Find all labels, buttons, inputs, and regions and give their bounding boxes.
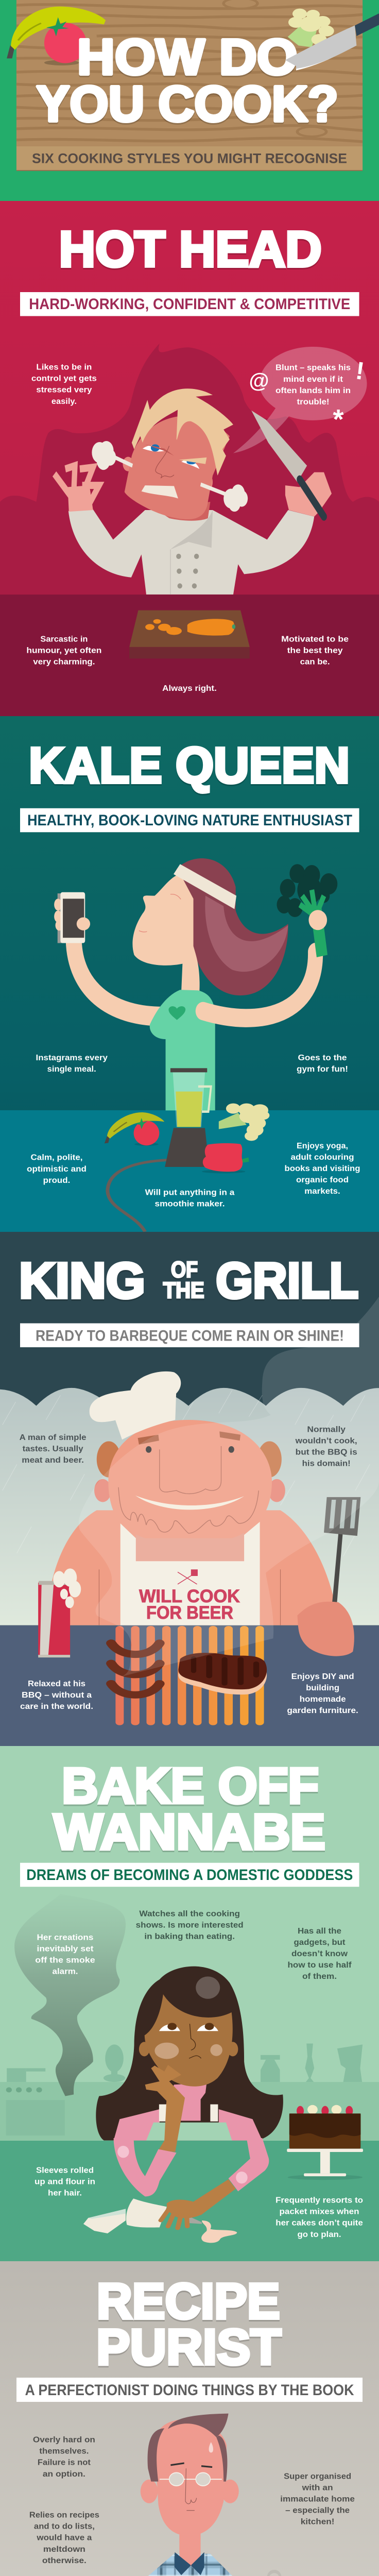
heading: WANNABE bbox=[54, 1804, 325, 1860]
text: relies on recipes: would have a bbox=[36, 2534, 92, 2543]
text: in control: Likes to be in bbox=[36, 363, 92, 372]
text: simple tastes: tastes. Usually bbox=[23, 1445, 83, 1453]
text: calm bbox=[27, 1153, 87, 1185]
chef hat bbox=[114, 1385, 177, 1439]
text: yoga: books and visiting bbox=[284, 1164, 360, 1173]
smoke bbox=[79, 1297, 379, 1678]
text: cooking shows: in baking than eating. bbox=[144, 1933, 235, 1941]
swear symbols: @ bbox=[249, 369, 269, 392]
text: DIY bbox=[287, 1672, 358, 1715]
text: DIY: building bbox=[306, 1684, 339, 1692]
text: hard on themselves bbox=[33, 2436, 95, 2479]
text: blunt: trouble! bbox=[297, 398, 330, 406]
arms, piping bag and batter bbox=[83, 2138, 269, 2243]
text: simple tastes: A man of simple bbox=[20, 1433, 87, 1442]
hair bbox=[168, 2414, 229, 2437]
text: gadgets: of them. bbox=[302, 1972, 337, 1981]
mouth bbox=[142, 485, 178, 499]
character: bake off wannabe bbox=[96, 1967, 283, 2152]
left hand bbox=[55, 466, 99, 503]
text: sleeves: up and flour in bbox=[35, 2178, 95, 2187]
text: relies on recipes: Relies on recipes bbox=[29, 2511, 99, 2519]
panel: kale queen bbox=[0, 716, 379, 1232]
text: organised bbox=[280, 2472, 355, 2527]
icon: cauliflower bbox=[288, 9, 334, 47]
text: instagrams: Instagrams every bbox=[36, 1054, 108, 1062]
text: in control: control yet gets bbox=[31, 375, 97, 383]
hair bbox=[177, 858, 288, 995]
panel: bake off wannabe bbox=[0, 1746, 379, 2261]
hair bbox=[132, 388, 233, 476]
apron slogan: FOR BEER bbox=[146, 1603, 233, 1623]
text: motivated bbox=[281, 635, 349, 667]
character: hot head chef bbox=[55, 388, 332, 595]
text: blunt: Blunt – speaks his bbox=[275, 364, 351, 372]
right hand bbox=[285, 472, 332, 517]
text: blunt bbox=[275, 364, 351, 406]
tagline: READY TO BARBEQUE COME RAIN OR SHINE! bbox=[36, 1327, 344, 1345]
text: gadgets: how to use half bbox=[287, 1961, 352, 1970]
text: relies on recipes bbox=[29, 2511, 99, 2565]
food on grill bbox=[111, 1643, 267, 1695]
icon: banana and tomato bbox=[7, 7, 106, 65]
text: sarcastic: Sarcastic in bbox=[40, 635, 88, 644]
text: gym: gym for fun! bbox=[297, 1065, 348, 1074]
chopping board and carrot bbox=[129, 610, 250, 658]
rainy sky bbox=[0, 1388, 379, 1625]
heading bbox=[19, 1252, 358, 1309]
text: sarcastic bbox=[26, 635, 101, 667]
eyes bbox=[143, 445, 164, 451]
text: packet mixes: go to plan. bbox=[298, 2230, 341, 2239]
tagline bbox=[20, 1323, 359, 1347]
text: blunt: often lands him in bbox=[275, 386, 351, 395]
heading: KALE QUEEN bbox=[29, 737, 350, 793]
character: recipe purist bbox=[127, 2414, 281, 2576]
headband bbox=[174, 864, 236, 909]
apron bbox=[120, 1522, 260, 1625]
text: relaxed bbox=[20, 1680, 93, 1711]
text: simple tastes: meat and beer. bbox=[22, 1456, 84, 1465]
nose bbox=[156, 446, 174, 478]
text: relaxed: Relaxed at his bbox=[28, 1680, 85, 1688]
character: kale queen bbox=[54, 858, 337, 1127]
text: smoothie: Will put anything in a bbox=[145, 1188, 234, 1197]
apron slogan: WILL COOK bbox=[139, 1586, 240, 1606]
panel: hot head bbox=[0, 201, 379, 716]
text: hard on themselves: themselves. bbox=[39, 2447, 89, 2456]
text: gadgets: doesn’t know bbox=[291, 1950, 348, 1958]
beer can bbox=[38, 1583, 70, 1655]
head bbox=[154, 502, 210, 521]
heading: KING bbox=[19, 1252, 145, 1309]
text: sleeves: her hair. bbox=[48, 2189, 82, 2198]
heading: HOT HEAD bbox=[59, 221, 322, 277]
text: relies on recipes: otherwise. bbox=[42, 2556, 87, 2565]
shirt bbox=[150, 990, 215, 1110]
text: DIY: garden furniture. bbox=[287, 1706, 358, 1715]
text: always right: Always right. bbox=[162, 684, 217, 693]
icon: cake bbox=[287, 2105, 363, 2180]
face bbox=[145, 1994, 233, 2087]
heading: RECIPE bbox=[97, 2273, 280, 2329]
kitchen background bbox=[0, 2044, 379, 2141]
title: HOW DO bbox=[77, 29, 298, 85]
spatula bbox=[332, 1533, 343, 1609]
text: yoga bbox=[284, 1142, 360, 1196]
text: smoothie bbox=[145, 1188, 234, 1209]
text: blunt: mind even if it bbox=[283, 375, 343, 384]
turtleneck and sleeves bbox=[160, 2083, 206, 2121]
swear symbols: * bbox=[333, 404, 344, 435]
text: calm: Calm, polite, bbox=[31, 1153, 82, 1162]
grill bars bbox=[115, 1626, 264, 1725]
knife bbox=[251, 411, 307, 482]
text: domain: his domain! bbox=[302, 1459, 351, 1468]
text: sleeves bbox=[35, 2166, 95, 2198]
text: smoke alarm: alarm. bbox=[53, 1968, 78, 1976]
kitchen items: banana, tomato, cauliflower, blender, pepper bbox=[105, 1104, 269, 1232]
text: organised: with an bbox=[302, 2483, 333, 2492]
left arm bbox=[74, 940, 164, 1016]
text: cooking shows bbox=[136, 1909, 244, 1941]
text: hard on themselves: Overly hard on bbox=[33, 2436, 95, 2444]
glasses and features bbox=[170, 2463, 212, 2467]
text: sleeves: Sleeves rolled bbox=[36, 2166, 94, 2175]
text: instagrams: single meal. bbox=[47, 1065, 96, 1074]
tagline bbox=[20, 808, 359, 832]
arm and hand at chin bbox=[158, 2094, 185, 2152]
text: sarcastic: very charming. bbox=[33, 658, 95, 667]
text: gym bbox=[297, 1054, 348, 1074]
text: cooking shows: Watches all the cooking bbox=[139, 1909, 240, 1918]
heading: BAKE OFF bbox=[62, 1758, 319, 1814]
panel: header bbox=[0, 0, 379, 201]
panel: recipe purist bbox=[0, 2261, 379, 2576]
text: smoke alarm: inevitably set bbox=[37, 1944, 94, 1954]
jacket bbox=[68, 509, 314, 595]
text: domain: wouldn’t cook, bbox=[295, 1436, 357, 1446]
text: DIY: homemade bbox=[300, 1695, 346, 1704]
smoke bbox=[14, 1894, 126, 2096]
title bbox=[37, 29, 338, 132]
face and neck bbox=[132, 874, 200, 992]
text: relies on recipes: and to do lists, bbox=[34, 2522, 95, 2531]
heading: PURIST bbox=[96, 2319, 281, 2375]
text: organised: – especially the bbox=[285, 2506, 350, 2515]
icon: knife bbox=[277, 13, 379, 71]
heading: OF bbox=[171, 1257, 198, 1282]
right arm bbox=[203, 952, 316, 1018]
text: smoothie: smoothie maker. bbox=[154, 1199, 225, 1209]
heading bbox=[96, 2273, 281, 2375]
text: motivated: the best they bbox=[287, 647, 343, 655]
swear symbols bbox=[249, 357, 366, 435]
text: relaxed: care in the world. bbox=[20, 1702, 93, 1711]
text: sarcastic: humour, yet often bbox=[26, 647, 101, 655]
heading: THE bbox=[163, 1278, 204, 1303]
text: smoke alarm: off the smoke bbox=[35, 1956, 95, 1965]
text: organised: kitchen! bbox=[301, 2518, 334, 2527]
text: organised: Super organised bbox=[284, 2472, 351, 2481]
title: YOU COOK? bbox=[37, 76, 338, 132]
text: cooking shows: shows. Is more interested bbox=[136, 1921, 244, 1930]
tagline bbox=[20, 292, 359, 316]
sweat bbox=[209, 2442, 213, 2452]
text: relies on recipes: meltdown bbox=[43, 2545, 85, 2554]
apron logo bbox=[178, 1572, 197, 1584]
text: in control: easily. bbox=[51, 397, 77, 406]
head bbox=[141, 2480, 158, 2503]
speech bubble bbox=[233, 347, 367, 453]
broccoli bbox=[277, 864, 337, 917]
text: packet mixes: Frequently resorts to bbox=[275, 2196, 363, 2205]
steam bbox=[114, 457, 229, 495]
text: instagrams bbox=[36, 1054, 108, 1074]
text: gadgets: Has all the bbox=[298, 1927, 341, 1936]
face bbox=[138, 1431, 240, 1445]
hand bbox=[297, 1602, 354, 1656]
phone bbox=[58, 893, 63, 943]
text: yoga: adult colouring bbox=[290, 1153, 354, 1162]
text: packet mixes bbox=[275, 2196, 363, 2239]
text: calm: optimistic and bbox=[27, 1165, 87, 1174]
text: gym: Goes to the bbox=[298, 1054, 347, 1062]
subtitle: SIX COOKING STYLES YOU MIGHT RECOGNISE bbox=[32, 150, 347, 166]
apron slogan bbox=[139, 1586, 240, 1623]
text: simple tastes bbox=[20, 1433, 87, 1465]
text: smoke alarm: Her creations bbox=[37, 1933, 94, 1942]
chopping board bbox=[16, 0, 363, 171]
tagline bbox=[16, 2378, 363, 2402]
tagline bbox=[20, 1863, 359, 1887]
text: domain: Normally bbox=[307, 1425, 346, 1434]
text: yoga: organic food bbox=[296, 1176, 349, 1184]
swear symbols: ! bbox=[354, 357, 366, 385]
text: motivated: Motivated to be bbox=[281, 635, 349, 644]
text: motivated: can be. bbox=[300, 658, 330, 667]
heading bbox=[54, 1758, 325, 1860]
text: yoga: markets. bbox=[304, 1187, 340, 1196]
text: packet mixes: her cakes don’t quite bbox=[275, 2219, 363, 2228]
text: calm: proud. bbox=[43, 1176, 70, 1185]
text: hard on themselves: Failure is not bbox=[38, 2459, 91, 2467]
character: grill king bbox=[38, 1371, 360, 1657]
text: packet mixes: packet mixes when bbox=[279, 2208, 359, 2216]
text: smoke alarm bbox=[35, 1933, 95, 1976]
text: in control: stressed very bbox=[36, 386, 92, 395]
tagline: HEALTHY, BOOK-LOVING NATURE ENTHUSIAST bbox=[27, 812, 352, 829]
shirt bbox=[127, 2554, 253, 2576]
text: hard on themselves: an option. bbox=[43, 2470, 85, 2479]
text: gadgets bbox=[287, 1927, 352, 1981]
text: in control bbox=[31, 363, 97, 406]
blender jar bbox=[170, 1068, 207, 1072]
text: relaxed: BBQ – without a bbox=[22, 1691, 92, 1700]
text: domain: but the BBQ is bbox=[296, 1448, 357, 1457]
text: gadgets: gadgets, but bbox=[294, 1938, 346, 1947]
tagline: HARD-WORKING, CONFIDENT & COMPETITIVE bbox=[29, 296, 350, 313]
flames bbox=[0, 344, 379, 595]
text: organised: immaculate home bbox=[280, 2495, 355, 2504]
text: DIY: Enjoys DIY and bbox=[291, 1672, 354, 1681]
text: yoga: Enjoys yoga, bbox=[297, 1142, 348, 1150]
heading: GRILL bbox=[216, 1252, 358, 1309]
text: domain bbox=[295, 1425, 357, 1468]
panel: king of the grill bbox=[0, 1232, 379, 1746]
